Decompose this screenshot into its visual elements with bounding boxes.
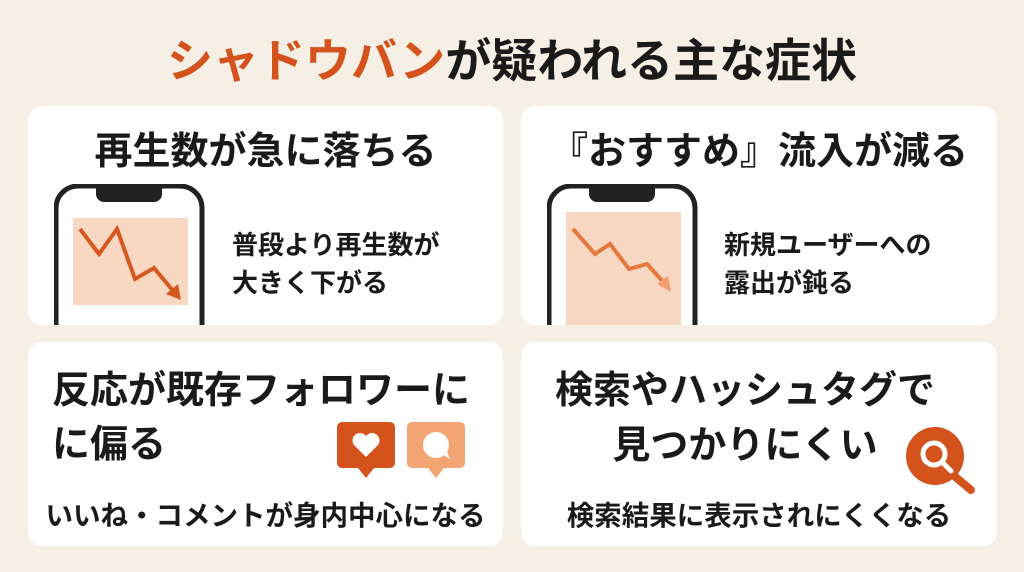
heading: 見つかりにくい — [612, 425, 878, 467]
text — [232, 230, 439, 298]
heading: 検索やハッシュタグで — [555, 370, 935, 412]
text: 大きく下がる — [232, 268, 388, 298]
panel: hard to find in search — [521, 342, 997, 546]
heading — [52, 370, 470, 466]
heading: 『おすすめ』流入が減る — [550, 131, 968, 173]
heading: 反応が既存フォロワーに — [52, 370, 470, 412]
text — [724, 230, 931, 298]
text: 検索結果に表示されにくくなる — [567, 500, 951, 531]
heading — [555, 370, 935, 467]
icon: phone with falling chart — [547, 184, 698, 325]
text: 普段より再生数が — [232, 230, 439, 260]
icon: heart bubble — [337, 422, 395, 478]
panel: play count drops — [28, 106, 503, 325]
heading: に偏る — [52, 424, 166, 466]
panel: reactions biased — [28, 342, 503, 546]
heading: 再生数が急に落ちる — [94, 131, 436, 173]
panel: recommended inflow drops — [521, 106, 997, 325]
icon: comment bubble — [407, 422, 465, 478]
icon: magnifier — [906, 427, 975, 494]
icon: phone with falling chart — [54, 184, 204, 325]
text: 新規ユーザーへの — [724, 230, 931, 260]
text: いいね・コメントが身内中心になる — [46, 500, 486, 531]
title: シャドウバンが疑われる主な症状 — [167, 35, 857, 87]
text: 露出が鈍る — [724, 268, 854, 298]
